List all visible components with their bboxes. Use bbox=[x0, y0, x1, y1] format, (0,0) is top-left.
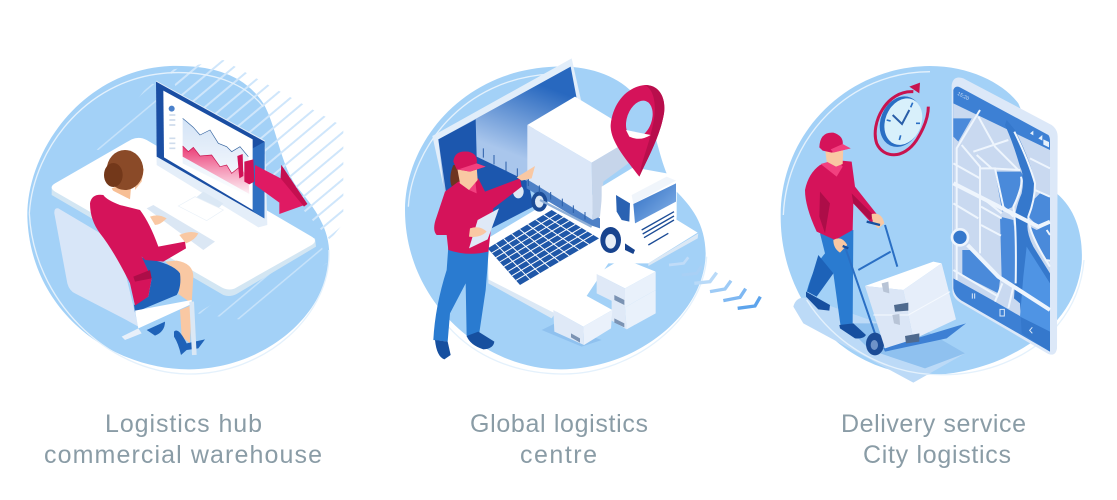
map pin bbox=[611, 85, 664, 177]
red down arrow bbox=[237, 154, 307, 214]
collar and neck bbox=[105, 180, 143, 208]
skirt bbox=[134, 257, 180, 312]
status icons bbox=[1030, 131, 1049, 147]
illustration: analyst at desk bbox=[27, 60, 343, 374]
illustration: courier and phone map bbox=[781, 66, 1084, 383]
nav icons bbox=[972, 293, 1032, 333]
blob background bbox=[27, 66, 329, 369]
caption: delivery service: Delivery service bbox=[841, 410, 1026, 438]
panel: global logistics centre bbox=[405, 58, 760, 469]
desktop monitor with charts bbox=[156, 81, 267, 227]
rear wheels bbox=[513, 185, 547, 212]
cargo box bbox=[483, 97, 638, 227]
caption: global logistics centre: Global logistics bbox=[470, 410, 648, 438]
hand truck bbox=[843, 222, 966, 355]
woman seated at keyboard bbox=[90, 150, 215, 355]
stacked parcels bbox=[865, 262, 956, 348]
phone screen bbox=[953, 87, 1050, 352]
chassis bbox=[527, 179, 600, 228]
lower legs bbox=[180, 305, 192, 343]
white ring bbox=[29, 73, 329, 374]
panel: delivery service bbox=[781, 66, 1084, 469]
worker with clipboard bbox=[433, 151, 535, 359]
panel: logistics hub bbox=[27, 60, 343, 469]
map roads bbox=[953, 110, 1050, 308]
jacket fold bbox=[133, 270, 152, 282]
caption: global logistics centre bbox=[470, 410, 648, 469]
caption: delivery service bbox=[841, 410, 1026, 469]
blob background bbox=[405, 67, 706, 369]
hatch lines bbox=[97, 60, 343, 320]
head bbox=[104, 150, 144, 190]
caption: logistics hub bbox=[44, 410, 322, 469]
map route band bbox=[1005, 120, 1050, 352]
caption: logistics hub: commercial warehouse bbox=[44, 441, 322, 469]
ground shadow bbox=[793, 298, 965, 383]
smartphone with map bbox=[952, 77, 1058, 355]
white ring bbox=[408, 74, 707, 374]
laptop bbox=[432, 58, 698, 318]
clock with arrow bbox=[872, 83, 929, 155]
map blocks bbox=[953, 103, 1050, 333]
status time: 15:20 bbox=[956, 91, 970, 102]
roundabout bbox=[952, 229, 968, 245]
white ring bbox=[783, 72, 1084, 375]
cab bbox=[600, 167, 677, 254]
map water areas bbox=[953, 118, 1050, 293]
desk bbox=[52, 138, 316, 296]
chair seat and leg bbox=[135, 300, 194, 355]
caption: logistics hub: Logistics hub bbox=[105, 410, 262, 438]
phone body bbox=[952, 77, 1058, 355]
hands bbox=[150, 215, 198, 243]
keyboard grid bbox=[488, 210, 599, 285]
chevrons bbox=[669, 257, 760, 308]
caption: global logistics centre: centre bbox=[520, 441, 597, 469]
map light area bbox=[1020, 247, 1050, 332]
truck bbox=[483, 97, 677, 254]
caption: delivery service: City logistics bbox=[863, 441, 1011, 469]
blob background bbox=[781, 66, 1082, 375]
jacket bbox=[90, 195, 186, 306]
illustration: laptop with truck bbox=[405, 58, 760, 374]
stacked boxes bbox=[542, 258, 656, 347]
courier bbox=[805, 133, 884, 339]
chair back bbox=[54, 208, 142, 340]
thigh bbox=[165, 261, 193, 303]
keyboard bbox=[147, 205, 215, 250]
shoes bbox=[147, 322, 205, 355]
